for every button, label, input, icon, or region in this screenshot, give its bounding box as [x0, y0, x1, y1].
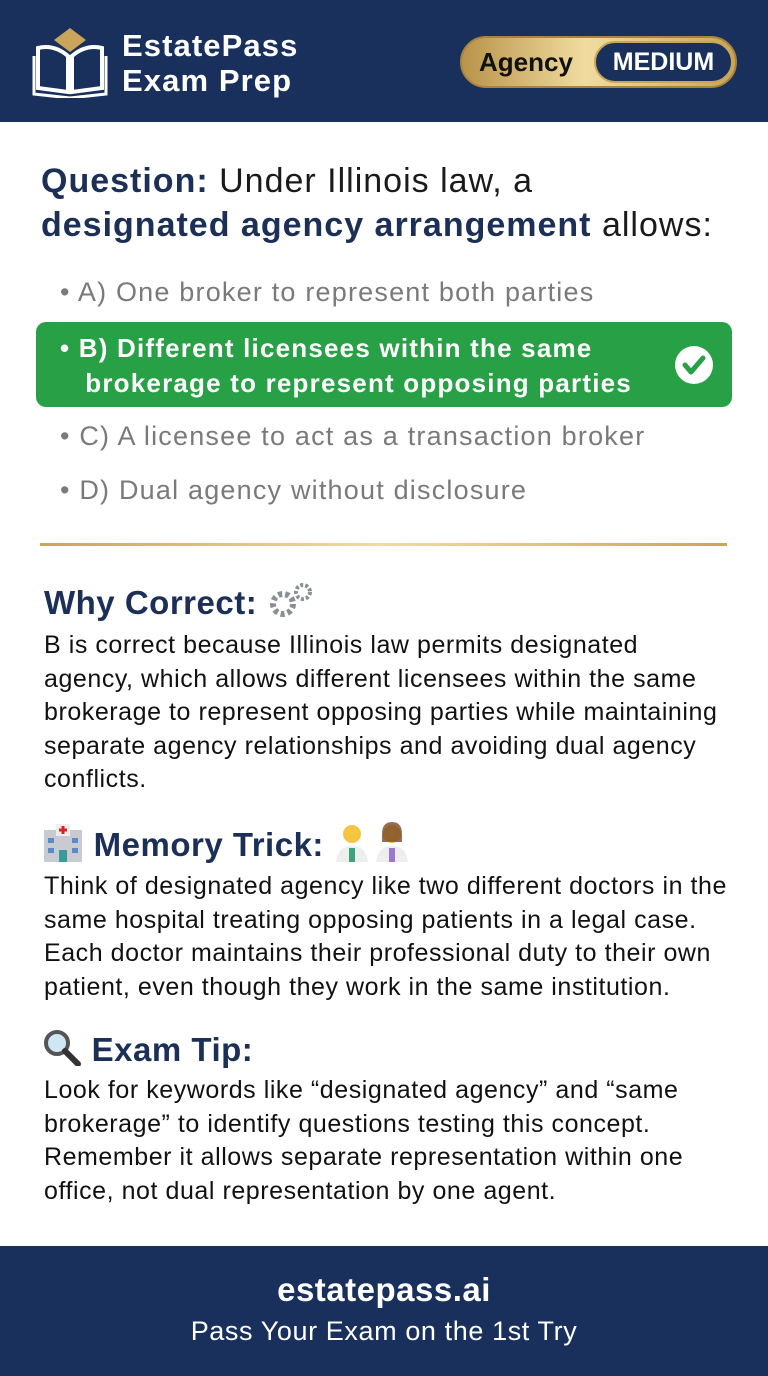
option D: • D) Dual agency without disclosure: [60, 475, 527, 505]
heading: memory trick: [44, 822, 408, 863]
text: memory trick: same hospital treating opposing patients in a legal case.: [44, 906, 697, 934]
icon: check: [675, 346, 713, 384]
brand name: [122, 28, 298, 98]
question: Question: Under Illinois law, a: [41, 162, 533, 200]
option A: • A) One broker to represent both parties: [60, 277, 594, 307]
option B correct: [36, 322, 732, 407]
footer site name: estatepass.ai: [277, 1271, 491, 1308]
text: why correct: conflicts.: [44, 765, 147, 793]
icon: book logo: [32, 28, 108, 98]
header bar: [0, 0, 768, 122]
text: why correct: [44, 631, 717, 793]
badge: Agency MEDIUM: MEDIUM: [613, 48, 714, 76]
text: why correct: separate agency relationships and avoiding dual agency: [44, 732, 696, 760]
question: designated agency arrangement allows:: [41, 206, 713, 244]
badge: Agency MEDIUM: Agency: [479, 47, 573, 77]
text: exam tip: brokerage” to identify questions testing this concept.: [44, 1110, 650, 1138]
text: exam tip: [44, 1076, 683, 1205]
text: memory trick: patient, even though they work in the same institution.: [44, 973, 670, 1001]
question: [41, 162, 713, 244]
heading: exam tip: Exam Tip:: [92, 1031, 253, 1068]
option B correct: brokerage to represent opposing parties: [85, 368, 632, 398]
heading: memory trick: Memory Trick:: [94, 826, 324, 863]
text: exam tip: Look for keywords like “designated agency” and “same: [44, 1076, 678, 1104]
brand name: EstatePass: [122, 28, 298, 63]
text: exam tip: Remember it allows separate representation within one: [44, 1143, 683, 1171]
footer tagline: Pass Your Exam on the 1st Try: [191, 1316, 577, 1346]
text: why correct: brokerage to represent opposing parties while maintaining: [44, 698, 717, 726]
option B correct: • B) Different licensees within the same: [60, 333, 592, 363]
heading: why correct: Why Correct:: [44, 584, 257, 621]
badge: Agency MEDIUM: [460, 36, 737, 88]
footer: [0, 1246, 768, 1376]
brand name: Exam Prep: [122, 63, 292, 98]
text: memory trick: Think of designated agency like two different doctors in the: [44, 872, 727, 900]
option C: • C) A licensee to act as a transaction broker: [60, 421, 645, 451]
text: memory trick: Each doctor maintains their professional duty to their own: [44, 939, 711, 967]
text: why correct: B is correct because Illinois law permits designated: [44, 631, 638, 659]
text: memory trick: [44, 872, 727, 1001]
text: exam tip: office, not dual representation by one agent.: [44, 1177, 556, 1205]
text: why correct: agency, which allows different licensees within the same: [44, 665, 696, 693]
